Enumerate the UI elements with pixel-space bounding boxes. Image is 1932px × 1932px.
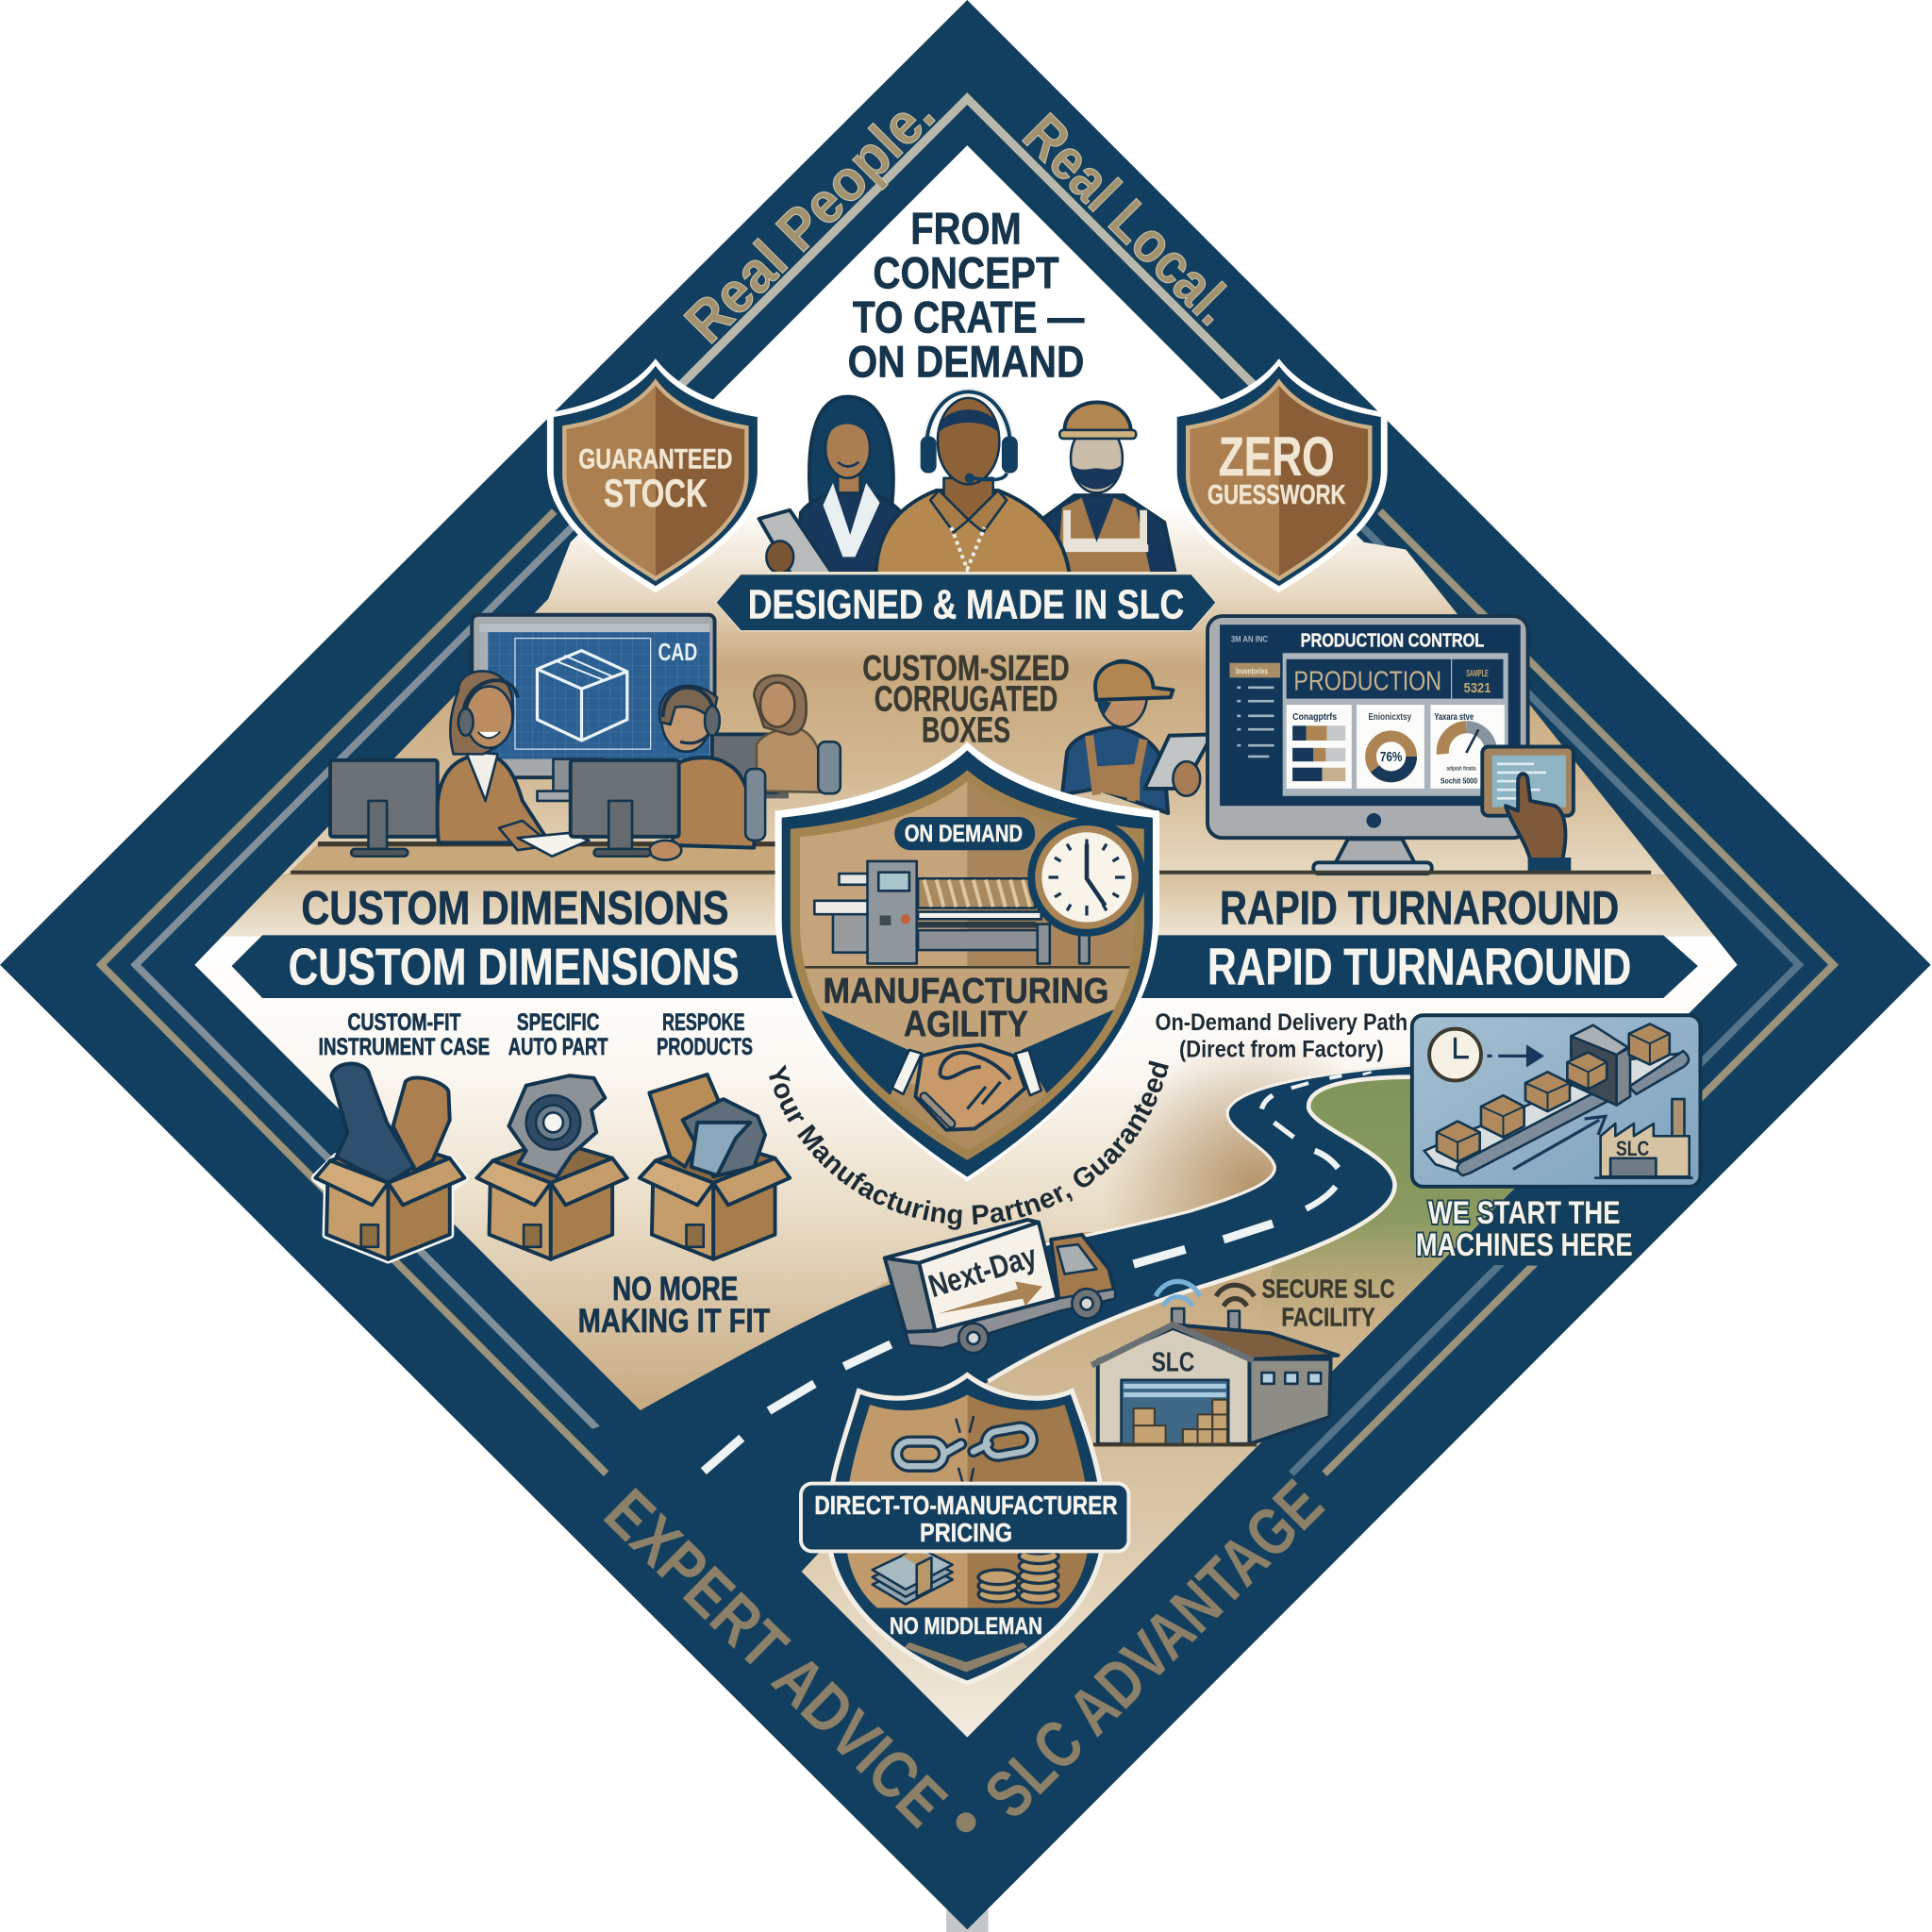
box: instrument case (315, 1064, 464, 1259)
title: FROM (910, 204, 1022, 254)
item labels: INSTRUMENT CASE (319, 1035, 490, 1060)
guitar case (331, 1064, 414, 1183)
wireframe box (537, 651, 627, 741)
banner: designed and made in SLC (716, 575, 1216, 631)
card: donut (1357, 705, 1424, 789)
conveyor boxes (1437, 1024, 1670, 1162)
CAD workstation scene (287, 615, 841, 874)
stripe: blue-gray right (1291, 508, 1799, 1474)
blue part (691, 1123, 750, 1175)
curved tagline: Your Manufacturing Partner, Guaranteed (769, 1060, 1169, 1230)
delivery path label: (Direct from Factory) (1179, 1038, 1384, 1063)
card: gauge (1430, 705, 1505, 789)
pricing ribbon (801, 1484, 1128, 1551)
no more making it fit: NO MORE (612, 1271, 738, 1307)
banner: rapid turnaround: RAPID TURNAROUND (1208, 938, 1631, 996)
road dashes (704, 1072, 1372, 1472)
monitor stand (1336, 839, 1414, 862)
item labels: CUSTOM-FIT (347, 1010, 460, 1036)
dashboard figure: 5321 (1464, 681, 1491, 696)
shield: zero guesswork (1171, 358, 1388, 592)
gray part (683, 1099, 765, 1176)
card: gauge: Sochit 5000 (1441, 777, 1478, 786)
shield text: GUARANTEED (578, 443, 732, 475)
title (848, 204, 1085, 387)
facility label (1261, 1274, 1395, 1331)
conveyor belt top (1424, 1054, 1687, 1173)
no more making it fit: MAKING IT FIT (578, 1303, 771, 1340)
band text: Real People: Real People. (673, 81, 947, 356)
CAD label: CAD (658, 638, 697, 666)
sign post (946, 1909, 989, 1932)
border stripes (101, 98, 1834, 1474)
truck arrow (939, 1281, 1042, 1313)
woman at desk (437, 671, 552, 850)
icon: coin stacks (978, 1539, 1058, 1603)
item labels: AUTO PART (508, 1035, 608, 1060)
stripe: tan left and right (101, 511, 1834, 1474)
side wall (1249, 1359, 1331, 1444)
windows (1261, 1373, 1274, 1384)
truck rear (885, 1258, 935, 1332)
box: bespoke product (640, 1074, 790, 1259)
CAD monitor (472, 615, 715, 801)
truck wheels (958, 1324, 989, 1353)
no middleman text: NO MIDDLEMAN (890, 1614, 1042, 1640)
clock (1027, 818, 1146, 937)
monitor camera (1366, 813, 1381, 828)
facility label: SECURE SLC (1261, 1274, 1395, 1303)
delivery path label (1155, 1010, 1407, 1063)
bottom shield (801, 1375, 1128, 1683)
item labels: SPECIFIC (517, 1010, 599, 1036)
back desk (727, 792, 789, 798)
dashboard figure: SAMPLE (1466, 669, 1489, 679)
back monitor (712, 734, 778, 792)
band text: Expert Advice: EXPERT ADVICE (591, 1474, 961, 1840)
card: gauge: adipiah finatia (1446, 765, 1476, 772)
paper (518, 833, 589, 857)
small clock (1429, 1029, 1481, 1080)
truck side (919, 1223, 1058, 1331)
truck cab (1051, 1235, 1115, 1306)
box: auto part (476, 1075, 627, 1259)
screen caption: 3M AN INC (1231, 634, 1268, 643)
dashboard word: PRODUCTION (1293, 666, 1441, 696)
title: TO CRATE — (853, 292, 1085, 342)
truck label: Next-Day (924, 1238, 1041, 1305)
card: donut: 76% (1380, 750, 1403, 765)
custom-sized corrugated boxes label: CORRUGATED (874, 680, 1058, 720)
field: top gradient (281, 145, 1666, 875)
caption: we start the machines here (1416, 1195, 1633, 1263)
heading: rapid turnaround: RAPID TURNAROUND (1220, 882, 1619, 935)
icon: handshake (892, 1045, 1041, 1130)
roller door (1122, 1380, 1228, 1444)
title: CONCEPT (873, 248, 1059, 298)
card: donut: Enionicxtsy (1368, 712, 1411, 723)
stripe: light top (653, 98, 1281, 413)
field: brown glow near road (1115, 1044, 1340, 1225)
custom-sized corrugated boxes label (862, 649, 1070, 750)
panel: conveyor (1412, 1015, 1700, 1187)
tan panel (649, 1074, 718, 1167)
desk (287, 841, 776, 874)
on demand pill (894, 817, 1035, 850)
road (640, 1064, 1417, 1573)
shield fill (845, 1395, 1090, 1607)
dashed arrow (1487, 1047, 1541, 1064)
item labels (319, 1010, 753, 1060)
pricing ribbon: DIRECT-TO-MANUFACTURER (814, 1491, 1118, 1520)
item labels: PRODUCTS (657, 1035, 753, 1060)
ground (1084, 1442, 1257, 1446)
caption: we start the machines here: MACHINES HERE (1416, 1227, 1633, 1263)
heading: custom dimensions: CUSTOM DIMENSIONS (301, 882, 729, 935)
roof (1173, 1324, 1338, 1359)
worker with tablet (1062, 660, 1212, 813)
tablet with hand (1482, 747, 1574, 874)
direction arrow (1513, 1116, 1606, 1170)
field: lower gradient (185, 937, 1750, 1417)
delivery truck (885, 1220, 1115, 1353)
stripe: gray left (136, 508, 641, 1473)
dashboard figure (1452, 659, 1491, 699)
banner: designed and made in SLC: DESIGNED & MADE IN SLC (748, 583, 1184, 628)
front monitor right (571, 760, 679, 857)
custom-sized corrugated boxes label: CUSTOM-SIZED (862, 649, 1070, 689)
delivery path label: On-Demand Delivery Path (1155, 1010, 1407, 1036)
figure: woman with tablet (759, 397, 912, 575)
figure: man with headset (876, 391, 1070, 575)
tan case (393, 1077, 450, 1171)
screen heading: PRODUCTION CONTROL (1301, 631, 1484, 652)
title: ON DEMAND (848, 337, 1084, 387)
field: lower tip (802, 1232, 1472, 1738)
sidebar (1230, 663, 1280, 757)
band dot (957, 1812, 975, 1832)
sidebar: Inventories (1236, 666, 1268, 675)
front monitor left (330, 760, 438, 857)
shield heading: MANUFACTURING (823, 972, 1109, 1011)
shield darker right half (967, 781, 1134, 966)
small factory (1594, 1099, 1693, 1179)
shield: guaranteed stock (547, 358, 764, 592)
chevron (905, 1642, 1027, 1672)
corrugator machine (814, 861, 1090, 963)
navy backing for machines caption (1444, 1187, 1706, 1267)
icon: broken chain (897, 1417, 1034, 1481)
band text: SLC Advantage: SLC ADVANTAGE (971, 1466, 1337, 1832)
conveyor rail (1457, 1084, 1617, 1175)
icon: cash stack (873, 1547, 953, 1605)
production monitor (1208, 616, 1528, 874)
custom-sized corrugated boxes label: BOXES (922, 710, 1010, 750)
stacked boxes (1134, 1400, 1227, 1444)
facility label: FACILITY (1281, 1302, 1375, 1331)
figure: worker with hard hat (1035, 402, 1175, 575)
man at desk (649, 686, 765, 860)
wifi signals (1156, 1281, 1255, 1306)
shield text: ZERO (1219, 426, 1335, 488)
card: bars (1287, 705, 1352, 789)
green field (1264, 1079, 1515, 1300)
card: gauge: Yaxara stve (1434, 712, 1474, 723)
SLC facility (1084, 1281, 1338, 1446)
dashboard frame (1283, 653, 1508, 796)
facility SLC sign: SLC (1152, 1348, 1194, 1378)
separator lines (291, 871, 1651, 874)
three staff figures (759, 391, 1175, 575)
no more making it fit (578, 1271, 771, 1340)
shield: zero guesswork: GUESSWORK (1208, 480, 1345, 510)
shield heading (823, 972, 1109, 1044)
truck chassis (906, 1289, 1115, 1348)
shield: guaranteed stock: STOCK (604, 471, 708, 515)
on demand pill: ON DEMAND (905, 822, 1023, 847)
shield plaque and lower field (806, 969, 1129, 1150)
central shield (775, 741, 1159, 1183)
machine gate (1571, 1025, 1630, 1106)
small factory: SLC (1616, 1137, 1649, 1160)
front wall (1098, 1328, 1249, 1444)
banner: custom dimensions: CUSTOM DIMENSIONS (289, 938, 740, 996)
road left merge into band (591, 1411, 801, 1590)
caption: we start the machines here: WE START THE (1428, 1195, 1621, 1231)
card: bars: Conagptrfs (1292, 712, 1337, 723)
white cut-out outline (315, 1064, 464, 1259)
band text: Real Local: Real Local. (1010, 102, 1246, 338)
back woman (754, 675, 841, 793)
shield heading: AGILITY (904, 1004, 1028, 1044)
field: tan bands (185, 874, 1750, 939)
item labels: RESPOKE (662, 1010, 745, 1036)
pricing ribbon: PRICING (920, 1518, 1012, 1547)
inner field (185, 136, 1750, 1738)
turbo part (508, 1075, 605, 1176)
